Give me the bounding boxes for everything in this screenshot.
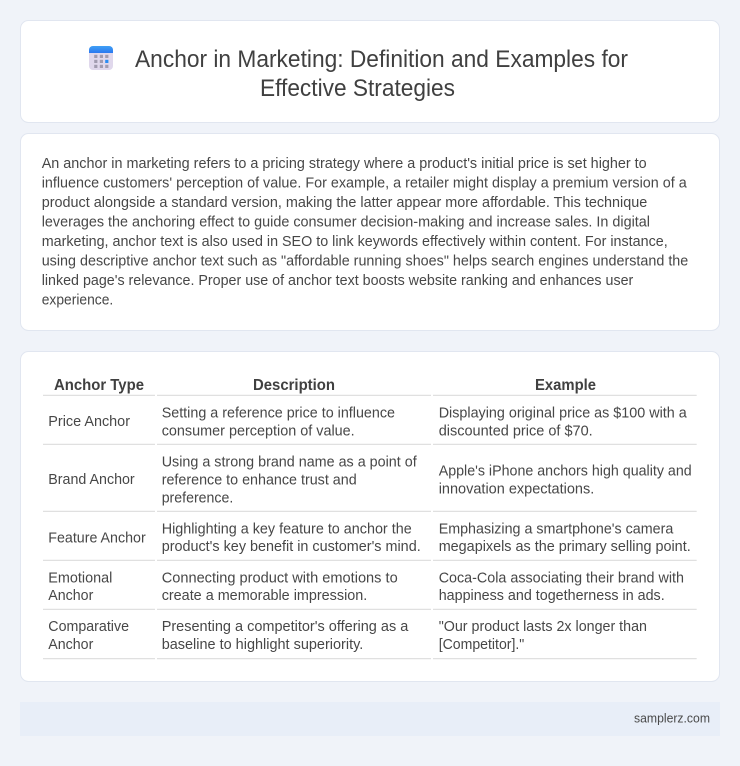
table row: feature anchor: megapixels as the primary selling point.	[439, 538, 691, 555]
table row: brand anchor: Brand Anchor	[48, 471, 135, 488]
table row: comparative anchor: Anchor	[48, 636, 93, 653]
footer bar	[20, 702, 720, 736]
footer source text: samplerz.com	[634, 711, 710, 726]
text block: definition paragraph: experience.	[42, 291, 113, 308]
text block: definition paragraph: marketing, anchor text is also used in SEO to link keywords effectively within content. For instance,	[42, 233, 668, 250]
panel: anchor types table	[20, 352, 720, 682]
table row: comparative anchor: "Our product lasts 2x longer than	[439, 618, 647, 635]
table row: emotional anchor: Coca-Cola associating their brand with	[439, 569, 684, 586]
icon: calendar	[89, 46, 113, 70]
table row: brand anchor: preference.	[162, 489, 233, 506]
table row: comparative anchor: [Competitor]."	[439, 636, 524, 653]
table row: comparative anchor: Presenting a competitor's offering as a	[162, 618, 409, 635]
table row: feature anchor: Emphasizing a smartphone's camera	[439, 520, 674, 537]
title: Anchor in Marketing: Definition and Examples for	[135, 46, 628, 73]
table header	[43, 377, 697, 395]
table row: emotional anchor: Connecting product with emotions to	[162, 569, 398, 586]
panel: introduction	[20, 134, 720, 330]
table row: price anchor: discounted price of $70.	[439, 422, 593, 439]
table row: comparative anchor: Comparative	[48, 618, 129, 635]
table row: price anchor	[43, 404, 697, 444]
table row: emotional anchor: happiness and togetherness in ads.	[439, 587, 665, 604]
table row: brand anchor: reference to enhance trust and	[162, 471, 357, 488]
table row: price anchor: Price Anchor	[48, 413, 130, 430]
table row: emotional anchor: Anchor	[48, 587, 93, 604]
text block: definition paragraph: leverages the anchoring effect to guide consumer decision-making and increase sales. In digital	[42, 213, 650, 230]
panel: title header	[20, 20, 720, 122]
table row: feature anchor	[43, 520, 697, 560]
table row: emotional anchor: Emotional	[48, 569, 112, 586]
table row: comparative anchor	[43, 618, 697, 659]
title: Effective Strategies	[260, 75, 455, 102]
table row: brand anchor: Apple's iPhone anchors high quality and	[439, 462, 692, 479]
title	[135, 46, 628, 102]
text block: definition paragraph: influence customers' perception of value. For example, a retailer might display a premium version of a	[42, 174, 687, 191]
table header: Anchor Type	[54, 377, 144, 394]
table row: price anchor: Displaying original price as $100 with a	[439, 404, 687, 421]
table row: brand anchor: Using a strong brand name as a point of	[162, 454, 417, 470]
table header: Description	[253, 377, 335, 394]
text block: definition paragraph: product alongside a standard version, making the latter appear more affordable. This technique	[42, 194, 647, 211]
table row: feature anchor: Highlighting a key feature to anchor the	[162, 520, 412, 537]
text block: definition paragraph	[42, 155, 688, 308]
table header: Example	[535, 377, 596, 394]
table row: brand anchor	[43, 454, 697, 511]
text block: definition paragraph: An anchor in marketing refers to a pricing strategy where a product's initial price is set higher to	[42, 155, 647, 172]
table row: feature anchor: Feature Anchor	[48, 529, 146, 546]
table row: price anchor: consumer perception of value.	[162, 422, 355, 439]
text block: definition paragraph: using descriptive anchor text such as "affordable running shoes" helps search engines understand the	[42, 252, 688, 269]
table row: price anchor: Setting a reference price to influence	[162, 404, 395, 421]
table row: feature anchor: product's key benefit in customer's mind.	[162, 538, 421, 555]
text block: definition paragraph: linked page's relevance. Proper use of anchor text boosts website ranking and enhances user	[42, 272, 633, 289]
table row: emotional anchor	[43, 569, 697, 609]
table row: emotional anchor: create a memorable impression.	[162, 587, 367, 604]
table row: comparative anchor: baseline to highlight superiority.	[162, 636, 363, 653]
table row: brand anchor: innovation expectations.	[439, 480, 594, 497]
